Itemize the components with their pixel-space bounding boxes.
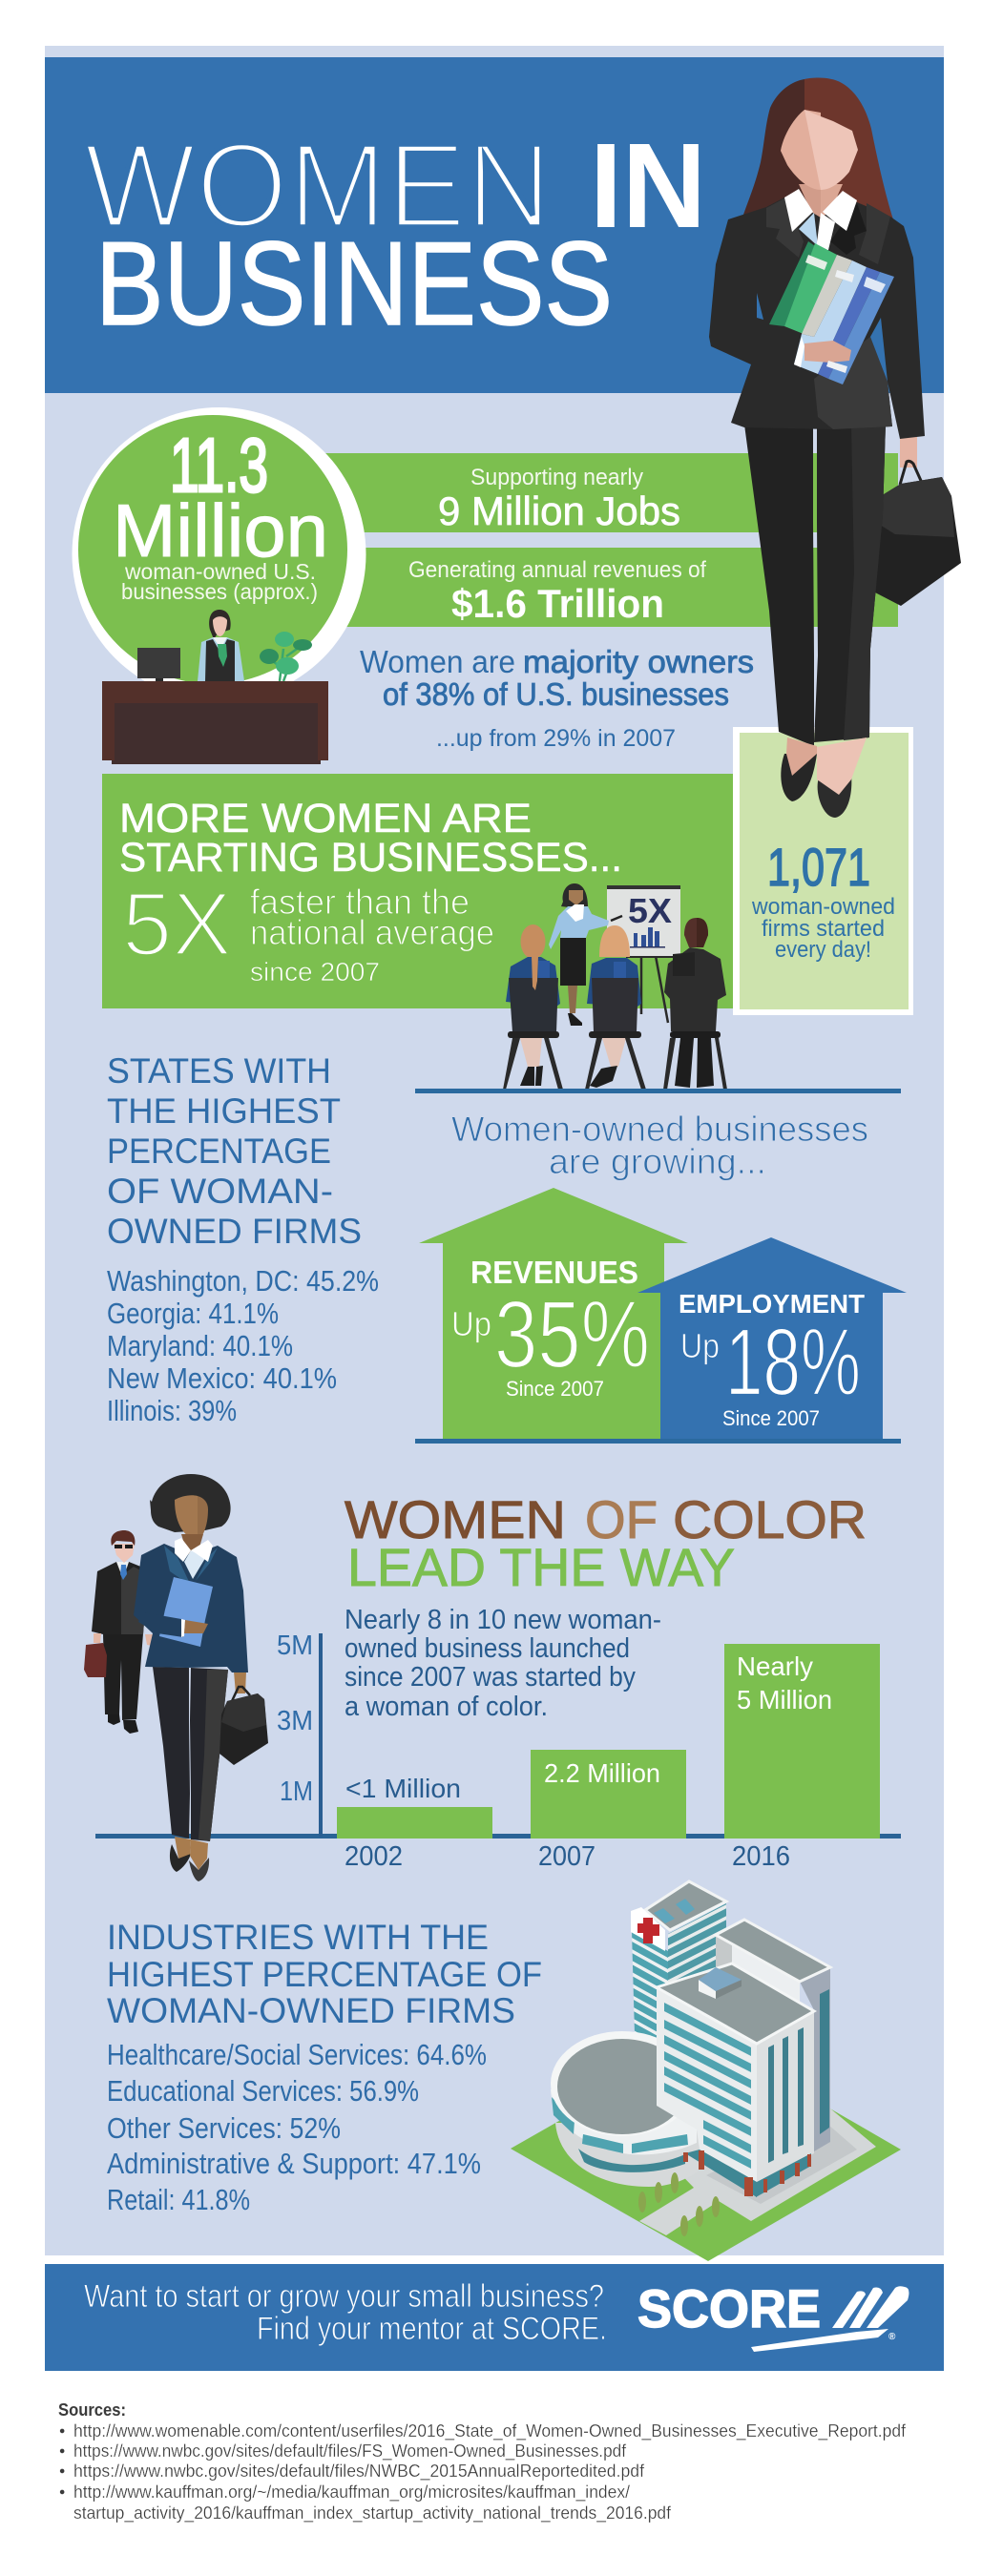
house: employment: 18% <box>725 1309 861 1416</box>
list: industries: Other Services: 52% <box>107 2111 341 2145</box>
gaps between arms and body <box>757 293 763 320</box>
house: revenues: REVENUES <box>470 1255 638 1290</box>
sources list: https://www.nwbc.gov/sites/default/files/NWBC_2015AnnualReportedited.pdf <box>73 2462 645 2482</box>
text: majority owners: majority owners <box>523 644 754 679</box>
footer text: Find your mentor at SCORE. <box>257 2311 607 2347</box>
house: revenues: Up <box>451 1304 491 1343</box>
heading: industries: HIGHEST PERCENTAGE OF <box>107 1955 542 1994</box>
heading <box>107 1051 362 1251</box>
heading: women of color lead the way: COLOR <box>673 1489 867 1549</box>
y axis labels: 3M <box>277 1706 313 1736</box>
page background panel <box>45 46 944 2255</box>
heading: OF WOMAN- <box>107 1172 333 1211</box>
heading: STATES WITH <box>107 1051 331 1091</box>
heading: women-owned businesses are growing <box>451 1110 868 1181</box>
bar 2007 <box>531 1750 686 1872</box>
heading: women of color lead the way: LEAD THE WAY <box>347 1537 735 1597</box>
hand holding bag <box>234 1672 246 1693</box>
sources list <box>59 2421 907 2524</box>
hair <box>742 79 804 229</box>
SCORE logo: SCORE <box>637 2278 821 2338</box>
heading: industries: INDUSTRIES WITH THE <box>107 1918 489 1957</box>
icon: plant <box>260 632 312 681</box>
heading: women of color lead the way: WOMEN <box>345 1489 566 1549</box>
bar 2002: <1 Million <box>345 1774 461 1803</box>
trees <box>638 2172 720 2236</box>
roof box <box>699 1980 716 1999</box>
panel: 1,071 firms started: every day! <box>775 937 871 963</box>
sources list: http://www.womenable.com/content/userfiles/2016_State_of_Women-Owned_Businesses_Executive_Report.pdf <box>73 2421 907 2441</box>
list: Washington, DC: 45.2% <box>107 1264 379 1298</box>
list: industries: Educational Services: 56.9% <box>107 2074 419 2108</box>
ground floor <box>685 2150 757 2197</box>
hand <box>794 337 851 373</box>
house: revenues: 35% <box>494 1281 650 1388</box>
audience member middle <box>585 925 646 1090</box>
heading: women-owned businesses are growing: Women-owned businesses <box>451 1110 868 1149</box>
list: Illinois: 39% <box>107 1394 237 1427</box>
footer text <box>84 2278 607 2347</box>
bar 2016: 2016 <box>732 1841 790 1872</box>
illustration: businessman walking <box>84 1530 153 1734</box>
sources list: https://www.nwbc.gov/sites/default/files/FS_Women-Owned_Businesses.pdf <box>73 2441 627 2462</box>
list: New Mexico: 40.1% <box>107 1361 337 1395</box>
list: industries <box>107 2038 487 2216</box>
icon: receptionist <box>198 610 244 681</box>
footer text: Want to start or grow your small business? <box>84 2278 604 2315</box>
stat bar: jobs: Supporting nearly <box>470 465 643 490</box>
icon: binders <box>769 241 894 384</box>
bar 2016: Nearly <box>737 1652 813 1681</box>
list: Maryland: 40.1% <box>107 1329 293 1362</box>
list: Georgia: 41.1% <box>107 1297 279 1330</box>
house: employment: Since 2007 <box>722 1406 820 1430</box>
panel: more women are starting businesses: faster than the <box>250 883 470 922</box>
panel: 1,071 firms started: 1,071 <box>767 837 870 897</box>
handbag <box>870 437 961 606</box>
white strip above footer <box>45 2255 944 2264</box>
panel: 1,071 firms started: woman-owned <box>751 894 895 920</box>
house: employment <box>637 1237 907 1439</box>
y axis labels: 1M <box>280 1776 313 1807</box>
panel: more women are starting businesses: STARTING BUSINESSES... <box>119 835 622 881</box>
main tower <box>657 1963 814 2197</box>
sources list: startup_activity_2016/kauffman_index_startup_activity_national_trends_2016.pdf <box>73 2503 672 2524</box>
audience member right <box>663 918 727 1090</box>
jacket <box>709 197 925 439</box>
panel: more women are starting businesses: 5X <box>122 874 232 975</box>
sources list: http://www.kauffman.org/~/media/kauffman_org/microsites/kauffman_index/ <box>73 2483 630 2503</box>
briefcase <box>84 1643 107 1677</box>
heading: women-owned businesses are growing: are growing... <box>549 1142 766 1181</box>
stat circle: 11.3 million: woman-owned U.S. <box>124 559 316 584</box>
heading: THE HIGHEST <box>107 1091 341 1131</box>
text: nearly 8 in 10: owned business launched <box>345 1633 630 1664</box>
bar 2016 <box>724 1644 880 1872</box>
rotunda <box>551 2031 699 2187</box>
text: nearly 8 in 10 <box>345 1605 661 1722</box>
illustration: businesswoman with binders and bag <box>709 78 961 818</box>
bar 2016: 5 Million <box>737 1685 832 1714</box>
text: majority owners: of 38% of U.S. businesses <box>383 676 729 712</box>
sources list: • <box>59 2421 65 2441</box>
SCORE logo <box>637 2278 909 2352</box>
SCORE logo: ® <box>888 2332 896 2342</box>
flip chart: 5X <box>628 891 672 930</box>
sources <box>58 2400 907 2524</box>
panel: 1,071 firms started: firms started <box>762 916 885 942</box>
icon: monitor <box>137 648 180 682</box>
collar <box>184 1550 207 1579</box>
title: WOMEN <box>84 118 552 253</box>
house: employment: Up <box>680 1326 720 1365</box>
face <box>175 1495 198 1541</box>
panel: more women are starting businesses: national average <box>250 913 494 952</box>
house: revenues: Since 2007 <box>506 1377 604 1401</box>
title <box>84 118 706 350</box>
heading: industries <box>107 1918 542 2216</box>
stat bar: revenues: $1.6 Trillion <box>451 581 664 626</box>
shoes <box>781 737 867 818</box>
text: nearly 8 in 10: a woman of color. <box>345 1692 548 1722</box>
heading: industries: WOMAN-OWNED FIRMS <box>107 1991 515 2030</box>
list: industries: Healthcare/Social Services: 64.6% <box>107 2038 487 2071</box>
text: nearly 8 in 10: Nearly 8 in 10 new woman- <box>345 1605 661 1635</box>
stat bar: jobs: 9 Million Jobs <box>438 488 680 533</box>
bar 2007: 2007 <box>538 1841 595 1872</box>
text: majority owners <box>360 644 754 752</box>
illustration: hospital building <box>511 1881 901 2261</box>
icon: desk <box>102 681 328 764</box>
heading: PERCENTAGE <box>107 1132 331 1171</box>
rear wing <box>716 1920 830 2151</box>
sources list: • <box>59 2441 65 2461</box>
icon: receptionist at desk <box>102 610 328 764</box>
y axis labels: 5M <box>277 1631 313 1661</box>
presenter <box>549 883 622 1026</box>
sources list: • <box>59 2462 65 2481</box>
tower with red cross <box>631 1881 726 2051</box>
audience member left <box>503 924 563 1090</box>
sources list: • <box>59 2483 65 2502</box>
stat bar: revenues: Generating annual revenues of <box>408 557 706 583</box>
houses ground line <box>415 1439 901 1444</box>
trousers <box>744 425 886 746</box>
forearm and hand <box>138 1612 183 1637</box>
heading: OWNED FIRMS <box>107 1212 362 1251</box>
jacket <box>134 1544 248 1672</box>
window bands <box>664 2003 751 2169</box>
footer <box>45 2264 944 2371</box>
hair <box>150 1474 231 1532</box>
heading: women of color lead the way <box>345 1489 867 1597</box>
stat bar: revenues <box>344 548 898 627</box>
list: industries: Retail: 41.8% <box>107 2183 250 2216</box>
sources heading: Sources: <box>58 2400 126 2420</box>
list: industries: Administrative & Support: 47.1% <box>107 2147 481 2180</box>
stat circle: 11.3 million: businesses (approx.) <box>121 579 318 604</box>
bag <box>219 1687 268 1765</box>
house: revenues <box>419 1188 688 1439</box>
bar 2002: 2002 <box>345 1841 403 1872</box>
list <box>107 1264 379 1427</box>
text: majority owners: ...up from 29% in 2007 <box>436 725 676 752</box>
icon: red cross <box>637 1918 659 1943</box>
stat circle: 11.3 million: Million <box>113 488 328 572</box>
text: nearly 8 in 10: since 2007 was started by <box>345 1662 636 1693</box>
folder <box>159 1577 213 1647</box>
text: states with highest percentage <box>107 1051 379 1427</box>
bar 2002 <box>337 1774 492 1872</box>
legs <box>153 1667 228 1881</box>
lawn <box>511 2037 901 2261</box>
stat circle: 11.3 million <box>73 407 366 701</box>
panel: more women are starting businesses: MORE WOMEN ARE <box>119 796 532 841</box>
bar 2007: 2.2 Million <box>544 1758 660 1788</box>
stat bar: jobs <box>325 453 898 533</box>
neck and face <box>799 184 821 218</box>
stat circle: 11.3 million: 11.3 <box>170 423 268 508</box>
text: majority owners: Women are <box>360 644 515 679</box>
shirt and collar <box>799 213 818 246</box>
illustration: presentation audience <box>503 883 727 1090</box>
header band <box>45 57 944 393</box>
flip chart <box>607 885 680 1023</box>
panel: more women are starting businesses <box>102 774 733 1008</box>
illustration: businesswoman of color <box>134 1474 268 1881</box>
floor line <box>415 1089 901 1093</box>
heading: women of color lead the way: OF <box>585 1489 658 1549</box>
chart: women of color businesses <box>95 1631 901 1872</box>
panel: 1,071 firms started <box>733 727 913 1015</box>
title: IN <box>590 118 706 253</box>
title: BUSINESS <box>95 218 613 350</box>
house: employment: EMPLOYMENT <box>679 1289 865 1319</box>
pavement <box>573 2099 876 2235</box>
y axis labels <box>277 1631 313 1807</box>
panel: more women are starting businesses: since 2007 <box>250 957 380 987</box>
